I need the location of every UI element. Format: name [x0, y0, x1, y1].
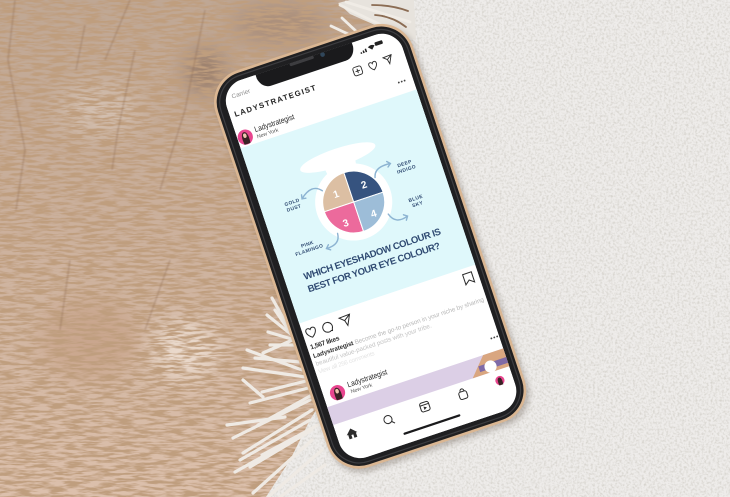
post question: BEST FOR YOUR EYE COLOUR?: [306, 241, 442, 295]
more dots: [398, 79, 406, 84]
notch speaker: [290, 56, 314, 66]
notch: [256, 42, 354, 86]
notch camera: [320, 52, 325, 57]
label blue sky: SKY: [411, 200, 424, 209]
post question: WHICH EYESHADOW COLOUR IS: [302, 227, 442, 283]
post author: Ladystrategist: [253, 112, 296, 134]
wheel numbers: [333, 181, 377, 226]
post avatar: [238, 130, 253, 145]
label pink flamingo: FLAMINGO: [295, 243, 324, 258]
label deep indigo: INDIGO: [396, 164, 417, 176]
bottom fringe: [227, 298, 325, 497]
wheel halo: [315, 164, 392, 240]
top fringe: [331, 0, 416, 40]
likes count: 1,567 likes: [309, 335, 341, 351]
segment 2 deep indigo: [344, 172, 382, 202]
brand heading: LADYSTRATEGIST: [233, 83, 317, 119]
phone bezel: [208, 18, 532, 474]
arrow blue sky: [388, 213, 408, 221]
next post image band: [327, 348, 509, 426]
post location: New York: [256, 127, 280, 140]
heart icon: [368, 60, 377, 70]
caption line two: beautiful value-packed posts with your tribe.: [315, 322, 433, 368]
label gold dust: DUST: [286, 203, 302, 214]
save icon: [463, 272, 475, 285]
tab bar: [344, 388, 469, 440]
wheel numbers: 4: [370, 208, 379, 221]
phone gold frame: [205, 15, 535, 478]
wheel numbers: 2: [360, 179, 369, 192]
arrow deep indigo: [374, 160, 392, 178]
carrier label: Carrier: [231, 88, 251, 101]
peach shape: [467, 348, 509, 378]
add icon: [352, 65, 363, 76]
comments link: View all 256 comments: [317, 350, 376, 375]
label pink flamingo: PINK: [301, 241, 315, 250]
segment 1 gold dust: [323, 173, 353, 211]
reels icon: [419, 401, 431, 412]
caption: Ladystrategist Become the go-to person in your niche by sharing: [312, 296, 485, 360]
cloud stem: [326, 160, 356, 174]
post image: [241, 89, 475, 324]
comment icon: [321, 321, 334, 333]
home indicator: [403, 414, 461, 435]
next post avatar: [328, 383, 347, 402]
top icons: [352, 55, 394, 76]
screen: [218, 22, 522, 464]
home icon: [345, 427, 359, 440]
send icon: [383, 55, 394, 65]
cloud: [300, 142, 376, 173]
label blue sky: BLUE: [408, 195, 424, 204]
label deep indigo: DEEP: [397, 160, 413, 169]
bezel highlight: [212, 22, 528, 470]
wheel numbers: 3: [342, 218, 351, 230]
wheel numbers: 1: [332, 189, 341, 201]
share icon: [339, 314, 353, 327]
segment 3 pink flamingo: [324, 202, 363, 232]
linen fabric: [260, 0, 730, 497]
more dots lower: [490, 335, 498, 340]
purple strip: [478, 357, 508, 372]
next post location: New York: [350, 382, 373, 395]
wheel labels: [284, 160, 423, 256]
white badge: [483, 359, 498, 374]
colour wheel: [323, 172, 384, 232]
arrows: [299, 161, 410, 253]
wifi: [368, 44, 374, 50]
search icon: [383, 414, 395, 426]
signal: [360, 49, 367, 54]
phone shadow: [208, 18, 538, 481]
arrow pink flamingo: [326, 232, 339, 251]
segment 4 blue sky: [354, 192, 384, 231]
label gold dust: GOLD: [284, 198, 301, 208]
next post author: Ladystrategist: [346, 367, 389, 389]
shop icon: [457, 388, 468, 400]
post actions: [304, 272, 475, 339]
status icons: [360, 40, 383, 54]
battery: [374, 40, 383, 46]
arrow gold dust: [300, 186, 323, 199]
like icon: [305, 326, 317, 339]
small avatar: [494, 375, 506, 386]
phone: [205, 15, 535, 478]
